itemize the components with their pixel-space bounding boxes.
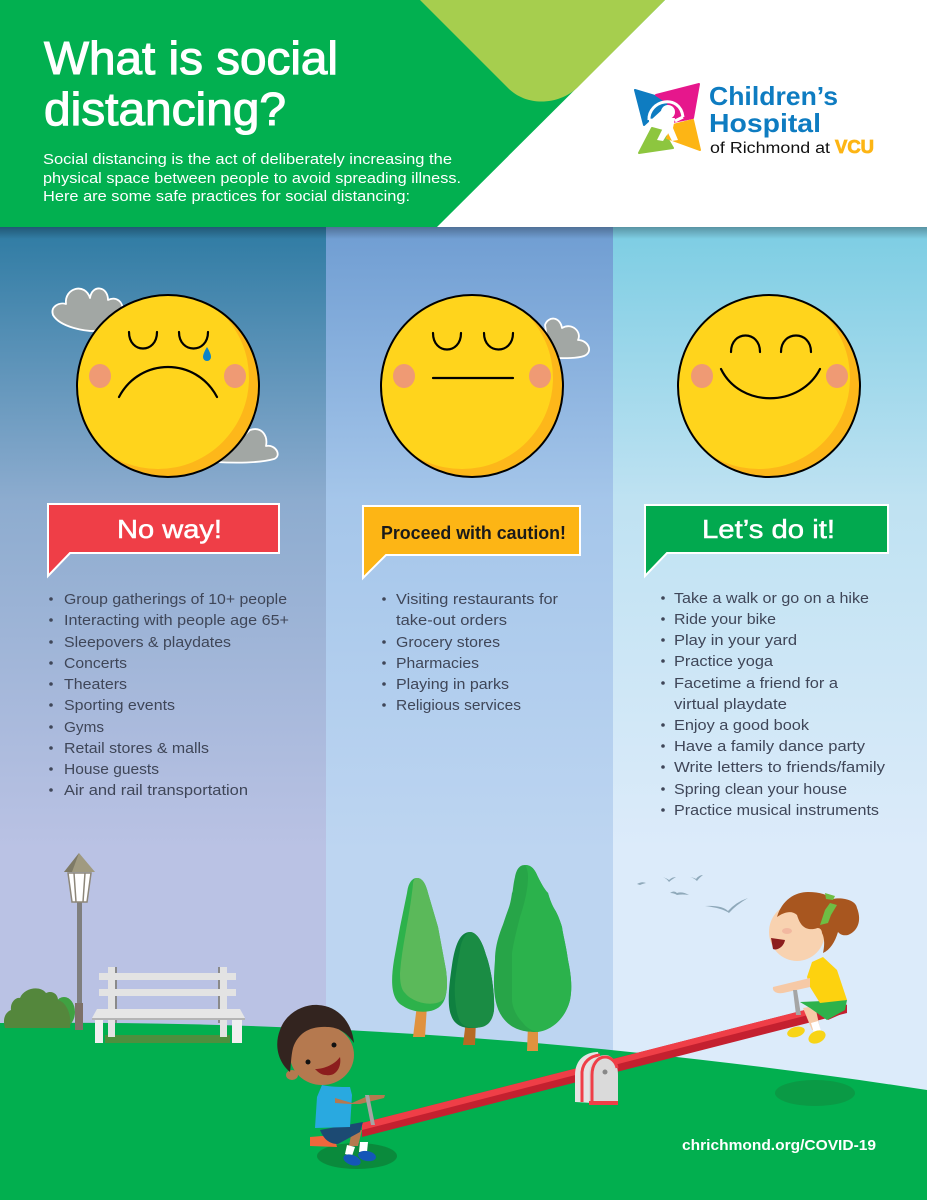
text block: caution list: Visiting restaurants for	[396, 591, 558, 608]
text block: do it list: Spring clean your house	[674, 781, 847, 798]
text block: do it list: Play in your yard	[674, 632, 797, 649]
footer url: chrichmond.org/COVID-19	[682, 1137, 876, 1154]
callout: Proceed with caution!: Proceed with caution!	[381, 523, 566, 543]
text block: no way list: House guests	[64, 761, 159, 778]
illustration: boy	[277, 1005, 385, 1168]
icon: tear	[203, 347, 211, 361]
shadow under girl	[775, 1080, 855, 1106]
logo wordmark: Children’s	[709, 81, 838, 111]
text block: no way list: Gyms	[64, 719, 104, 736]
callout: Let's do it!: Let’s do it!	[702, 514, 835, 544]
icon: trees	[392, 865, 571, 1051]
text block: caution list: Playing in parks	[396, 676, 509, 693]
intro text	[43, 151, 461, 205]
intro text: Here are some safe practices for social distancing:	[43, 188, 410, 205]
text block: do it list: Ride your bike	[674, 611, 776, 628]
icon: birds	[637, 875, 748, 913]
text block: do it list: virtual playdate	[674, 696, 787, 713]
logo VCU: VCU	[835, 137, 874, 157]
intro text: Social distancing is the act of deliberately increasing the	[43, 151, 452, 168]
text block: no way list: Interacting with people age 65+	[64, 612, 289, 629]
illustration: girl	[769, 892, 859, 1046]
text block: caution list: Religious services	[396, 697, 521, 714]
girl skirt and shirt	[800, 1000, 847, 1020]
text block: no way list: Theaters	[64, 676, 127, 693]
text block: no way list: Sporting events	[64, 697, 175, 714]
text block: do it list	[661, 590, 886, 819]
icon: seesaw	[362, 1001, 847, 1137]
shadow under boy	[317, 1143, 397, 1169]
icon: sad face	[67, 287, 259, 477]
ground	[0, 1023, 927, 1200]
text block: no way list: Retail stores & malls	[64, 740, 209, 757]
text block: caution list	[382, 591, 558, 714]
text block: no way list: Group gatherings of 10+ people	[64, 591, 287, 608]
icon: bench	[92, 967, 245, 1043]
text block: do it list: Facetime a friend for a	[674, 675, 839, 692]
text block: no way list: Air and rail transportation	[64, 782, 248, 799]
text block: caution list: take-out orders	[396, 612, 507, 629]
boy legs and shoes	[342, 1130, 377, 1168]
panel: column backgrounds	[0, 227, 927, 1107]
logo location line: of Richmond at	[710, 140, 831, 157]
callout: Proceed with caution!	[363, 506, 580, 578]
text block: caution list: Grocery stores	[396, 634, 500, 651]
icon: neutral face	[371, 287, 563, 477]
text block: do it list: Practice musical instruments	[674, 802, 879, 819]
text block: no way list	[49, 591, 289, 799]
title second line: distancing?	[44, 83, 286, 135]
girl smile	[771, 938, 785, 949]
text block: do it list: Practice yoga	[674, 653, 774, 670]
text block: do it list: Have a family dance party	[674, 738, 866, 755]
title: What is social	[44, 32, 338, 84]
girl head	[769, 903, 825, 961]
icon: lamp post	[64, 853, 95, 1030]
icon: clouds behind faces	[52, 288, 589, 463]
panel: header	[0, 0, 927, 227]
callout: Let's do it!	[645, 505, 888, 576]
seesaw pivot	[575, 1052, 618, 1105]
boy smile	[315, 1057, 340, 1075]
boy arm and handle	[335, 1095, 385, 1104]
text block: do it list: Take a walk or go on a hike	[674, 590, 869, 607]
logo wordmark	[709, 81, 838, 138]
intro text: physical space between people to avoid spreading illness.	[43, 170, 461, 187]
text block: no way list: Sleepovers & playdates	[64, 634, 231, 651]
logo: Children's Hospital of Richmond at VCU	[635, 81, 874, 157]
text block: caution list: Pharmacies	[396, 655, 479, 672]
text block: do it list: Enjoy a good book	[674, 717, 810, 734]
text block: do it list: Write letters to friends/family	[674, 759, 886, 776]
icon: bush	[4, 988, 75, 1028]
boy head	[286, 1070, 298, 1080]
logo wordmark: Hospital	[709, 108, 821, 138]
text block: no way list: Concerts	[64, 655, 127, 672]
callout: No way!	[48, 504, 279, 576]
girl arm and handle	[773, 978, 810, 993]
callout: No way!: No way!	[117, 514, 222, 544]
girl legs and shoes	[786, 1006, 828, 1046]
header accent shape	[420, 0, 665, 102]
icon: happy face	[668, 287, 860, 477]
